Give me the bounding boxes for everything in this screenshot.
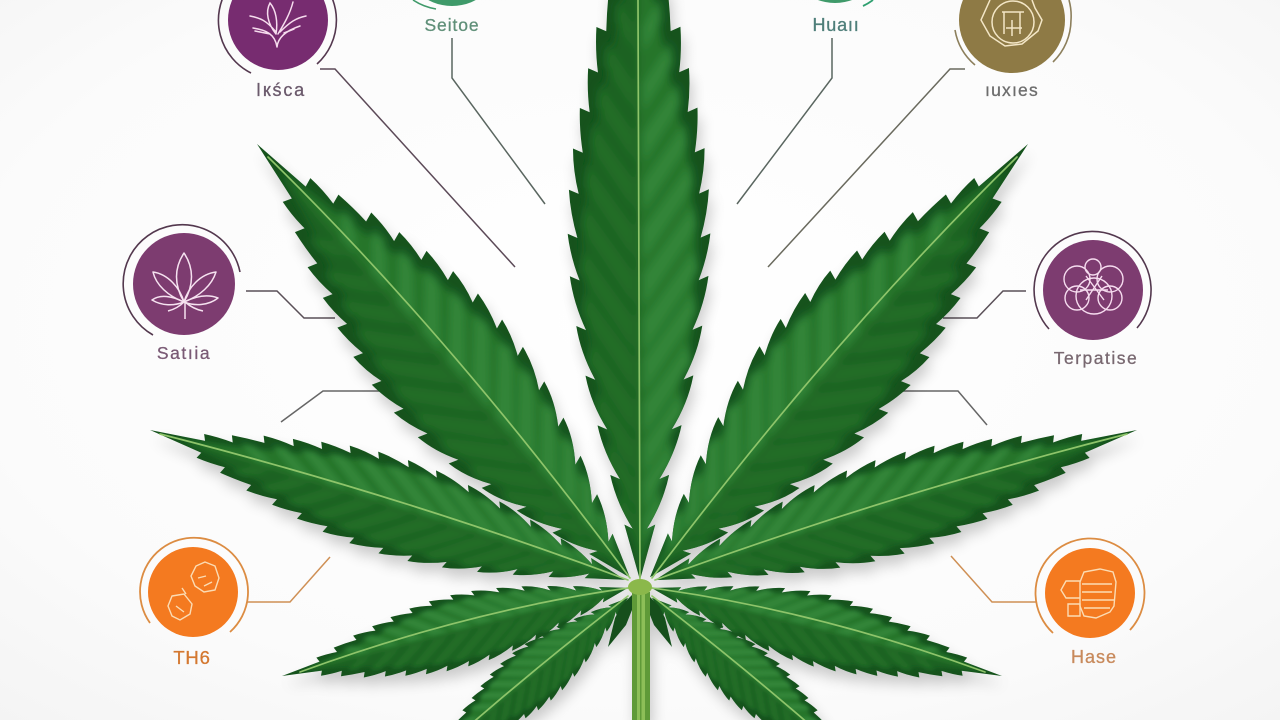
- outer ring: [955, 0, 1071, 65]
- icon panel: Satiia: [123, 225, 240, 363]
- icon: nuggets: [168, 562, 219, 620]
- icon panel: THG: [140, 538, 248, 668]
- connector: Hase: [951, 556, 1036, 602]
- icon: molecule: [1064, 259, 1123, 314]
- circle: [959, 0, 1065, 73]
- circle: [785, 0, 885, 3]
- circle: [1043, 240, 1143, 340]
- icon: hash blocks: [1061, 569, 1116, 618]
- connector: Ikśca: [320, 69, 515, 267]
- label: Huaıı: [812, 15, 860, 35]
- leaflet: center: [561, 0, 717, 584]
- icon: leaf: [152, 253, 218, 319]
- label: ıuxıes: [985, 80, 1039, 100]
- outer ring: [123, 225, 240, 335]
- connector: Satiia: [246, 291, 335, 318]
- connector: left middle: [281, 391, 381, 422]
- label: TH6: [173, 647, 211, 668]
- icon panel: Huaıı: [785, 0, 885, 35]
- circle: [133, 233, 235, 335]
- cannabis leaf illustration: [132, 0, 1155, 720]
- outer ring: [218, 0, 336, 73]
- connector: THG: [247, 557, 330, 602]
- label: Satıia: [157, 343, 211, 363]
- icon: flower: [250, 2, 306, 47]
- leaflet: lower left: [132, 379, 643, 631]
- outer ring: [1034, 231, 1151, 329]
- leaflet: upper right: [590, 91, 1088, 630]
- connector: Seitoe: [452, 38, 545, 204]
- icon: resin: [981, 0, 1042, 46]
- outer ring: [1035, 538, 1144, 633]
- label: Terpatise: [1054, 348, 1138, 368]
- leaflet: bottom inner left: [408, 572, 650, 720]
- outer ring: [863, 0, 873, 6]
- icon panel: ıuxıes: [955, 0, 1071, 100]
- leaflet: lower right: [637, 379, 1155, 631]
- stem node: [628, 579, 652, 595]
- connector lines: [246, 38, 1036, 602]
- icon panel: Ikśca: [218, 0, 336, 100]
- connector: right middle: [889, 391, 987, 425]
- circle: [1045, 548, 1135, 638]
- stem: [632, 592, 650, 720]
- leaflet: upper left: [197, 92, 690, 630]
- icon panel: Terpatise: [1034, 231, 1151, 368]
- outer ring: [413, 0, 436, 9]
- label: Hase: [1071, 647, 1117, 667]
- outer ring: [140, 538, 248, 632]
- circle: [402, 0, 502, 6]
- connector: ıuxıes: [768, 69, 965, 267]
- midrib veins: [160, 0, 1127, 720]
- leaflet: bottom inner right: [630, 572, 872, 720]
- connector: Huaııı: [737, 38, 832, 204]
- small leaflet right: [646, 595, 672, 647]
- connector: Terpatise: [943, 291, 1026, 318]
- icon panel: Seitoe: [402, 0, 502, 35]
- label: Iкśca: [256, 80, 306, 100]
- leaflet: bottom right: [640, 549, 1013, 715]
- circle: [228, 0, 328, 70]
- label: Seitoe: [424, 15, 480, 35]
- icon panel: Hase: [1035, 538, 1144, 667]
- circle: [148, 547, 238, 637]
- small leaflet left: [608, 595, 634, 647]
- leaflet: bottom left: [270, 549, 639, 715]
